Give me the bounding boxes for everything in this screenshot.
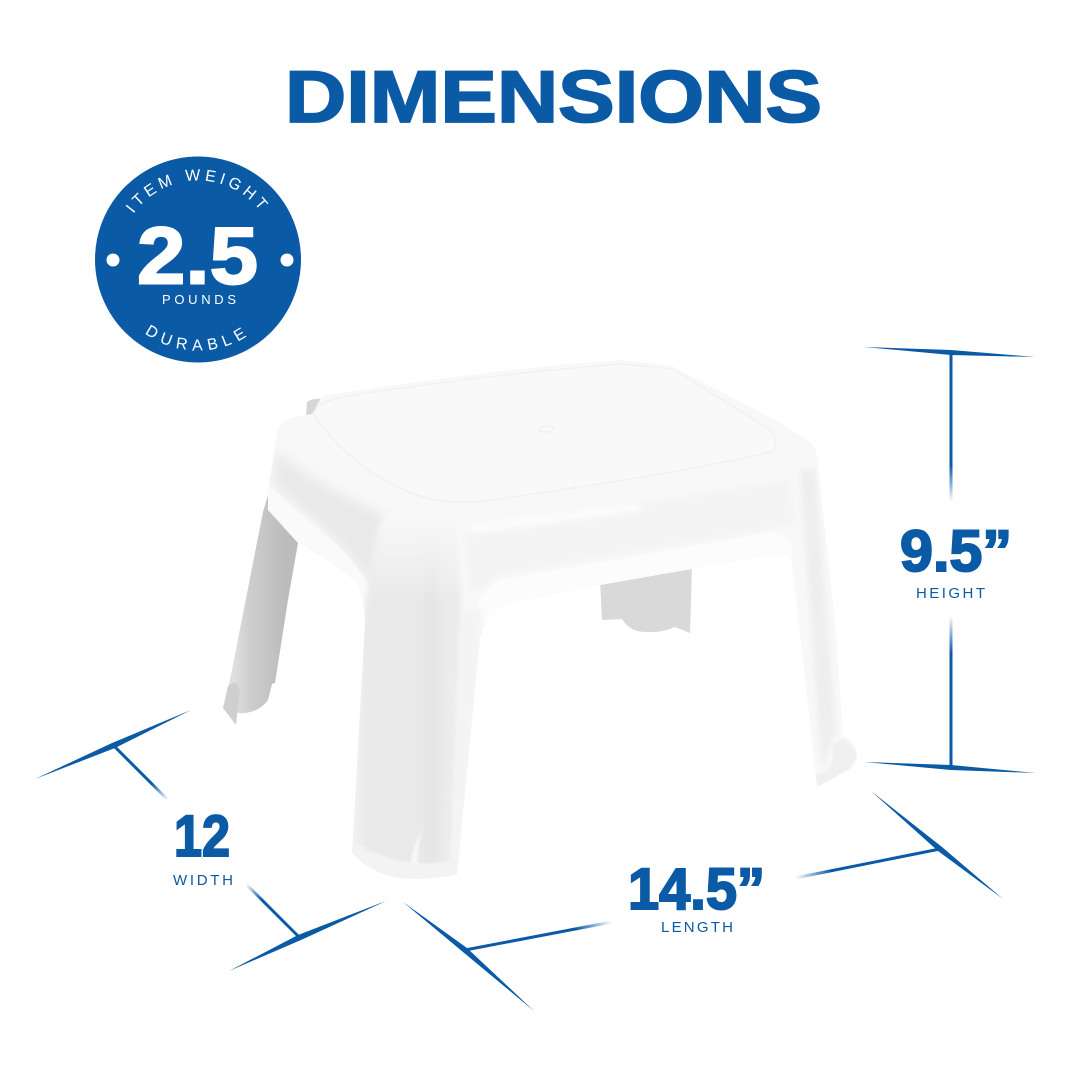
height top cap	[864, 347, 1035, 357]
side panel shade	[274, 458, 380, 576]
back corner notch	[306, 399, 322, 415]
front leg right highlight	[450, 610, 482, 880]
front leg crease	[411, 836, 420, 862]
width top stem	[113, 745, 168, 800]
height value: 9.5”	[900, 519, 1012, 584]
stool soft shading	[266, 450, 858, 880]
length right cap	[871, 791, 1003, 899]
height bracket	[864, 347, 1036, 773]
front band highlight	[470, 503, 640, 534]
back middle leg	[600, 565, 692, 633]
height label: HEIGHT	[916, 585, 985, 602]
width bottom stem	[246, 884, 299, 937]
length left cap	[403, 902, 534, 1011]
height bottom cap	[864, 762, 1036, 773]
badge left dot	[106, 254, 120, 266]
length left stem	[465, 922, 612, 950]
length bracket	[403, 791, 1003, 1011]
front leg foot	[366, 851, 445, 874]
right foot	[815, 738, 858, 788]
badge right dot	[280, 254, 294, 266]
back left foot tab	[223, 682, 240, 725]
width bottom cap	[229, 901, 386, 971]
side rail	[266, 489, 369, 612]
back left leg	[228, 495, 298, 713]
badge bottom arc text: DURABLE	[146, 324, 246, 351]
front leg shading	[356, 556, 460, 864]
width label: WIDTH	[173, 872, 233, 889]
stool body	[268, 360, 857, 879]
right leg shading	[804, 472, 833, 752]
top plate	[313, 364, 775, 502]
width value: 12	[174, 804, 230, 869]
width bracket	[35, 710, 386, 971]
badge unit: POUNDS	[162, 292, 236, 307]
front leg top highlight	[378, 510, 450, 563]
height top stem	[950, 354, 952, 502]
width top cap	[35, 710, 191, 779]
length right stem	[795, 849, 940, 878]
top plate center mark	[539, 426, 553, 432]
front band shade	[465, 480, 795, 595]
front rail	[601, 575, 656, 585]
length value: 14.5”	[628, 857, 765, 922]
stool illustration	[223, 360, 858, 880]
badge: item weight	[95, 156, 301, 362]
badge top arc text: ITEM WEIGHT	[126, 169, 268, 213]
length label: LENGTH	[661, 919, 733, 936]
badge number: 2.5	[137, 212, 258, 302]
height bottom stem	[950, 616, 952, 766]
title: DIMENSIONS	[285, 57, 822, 138]
